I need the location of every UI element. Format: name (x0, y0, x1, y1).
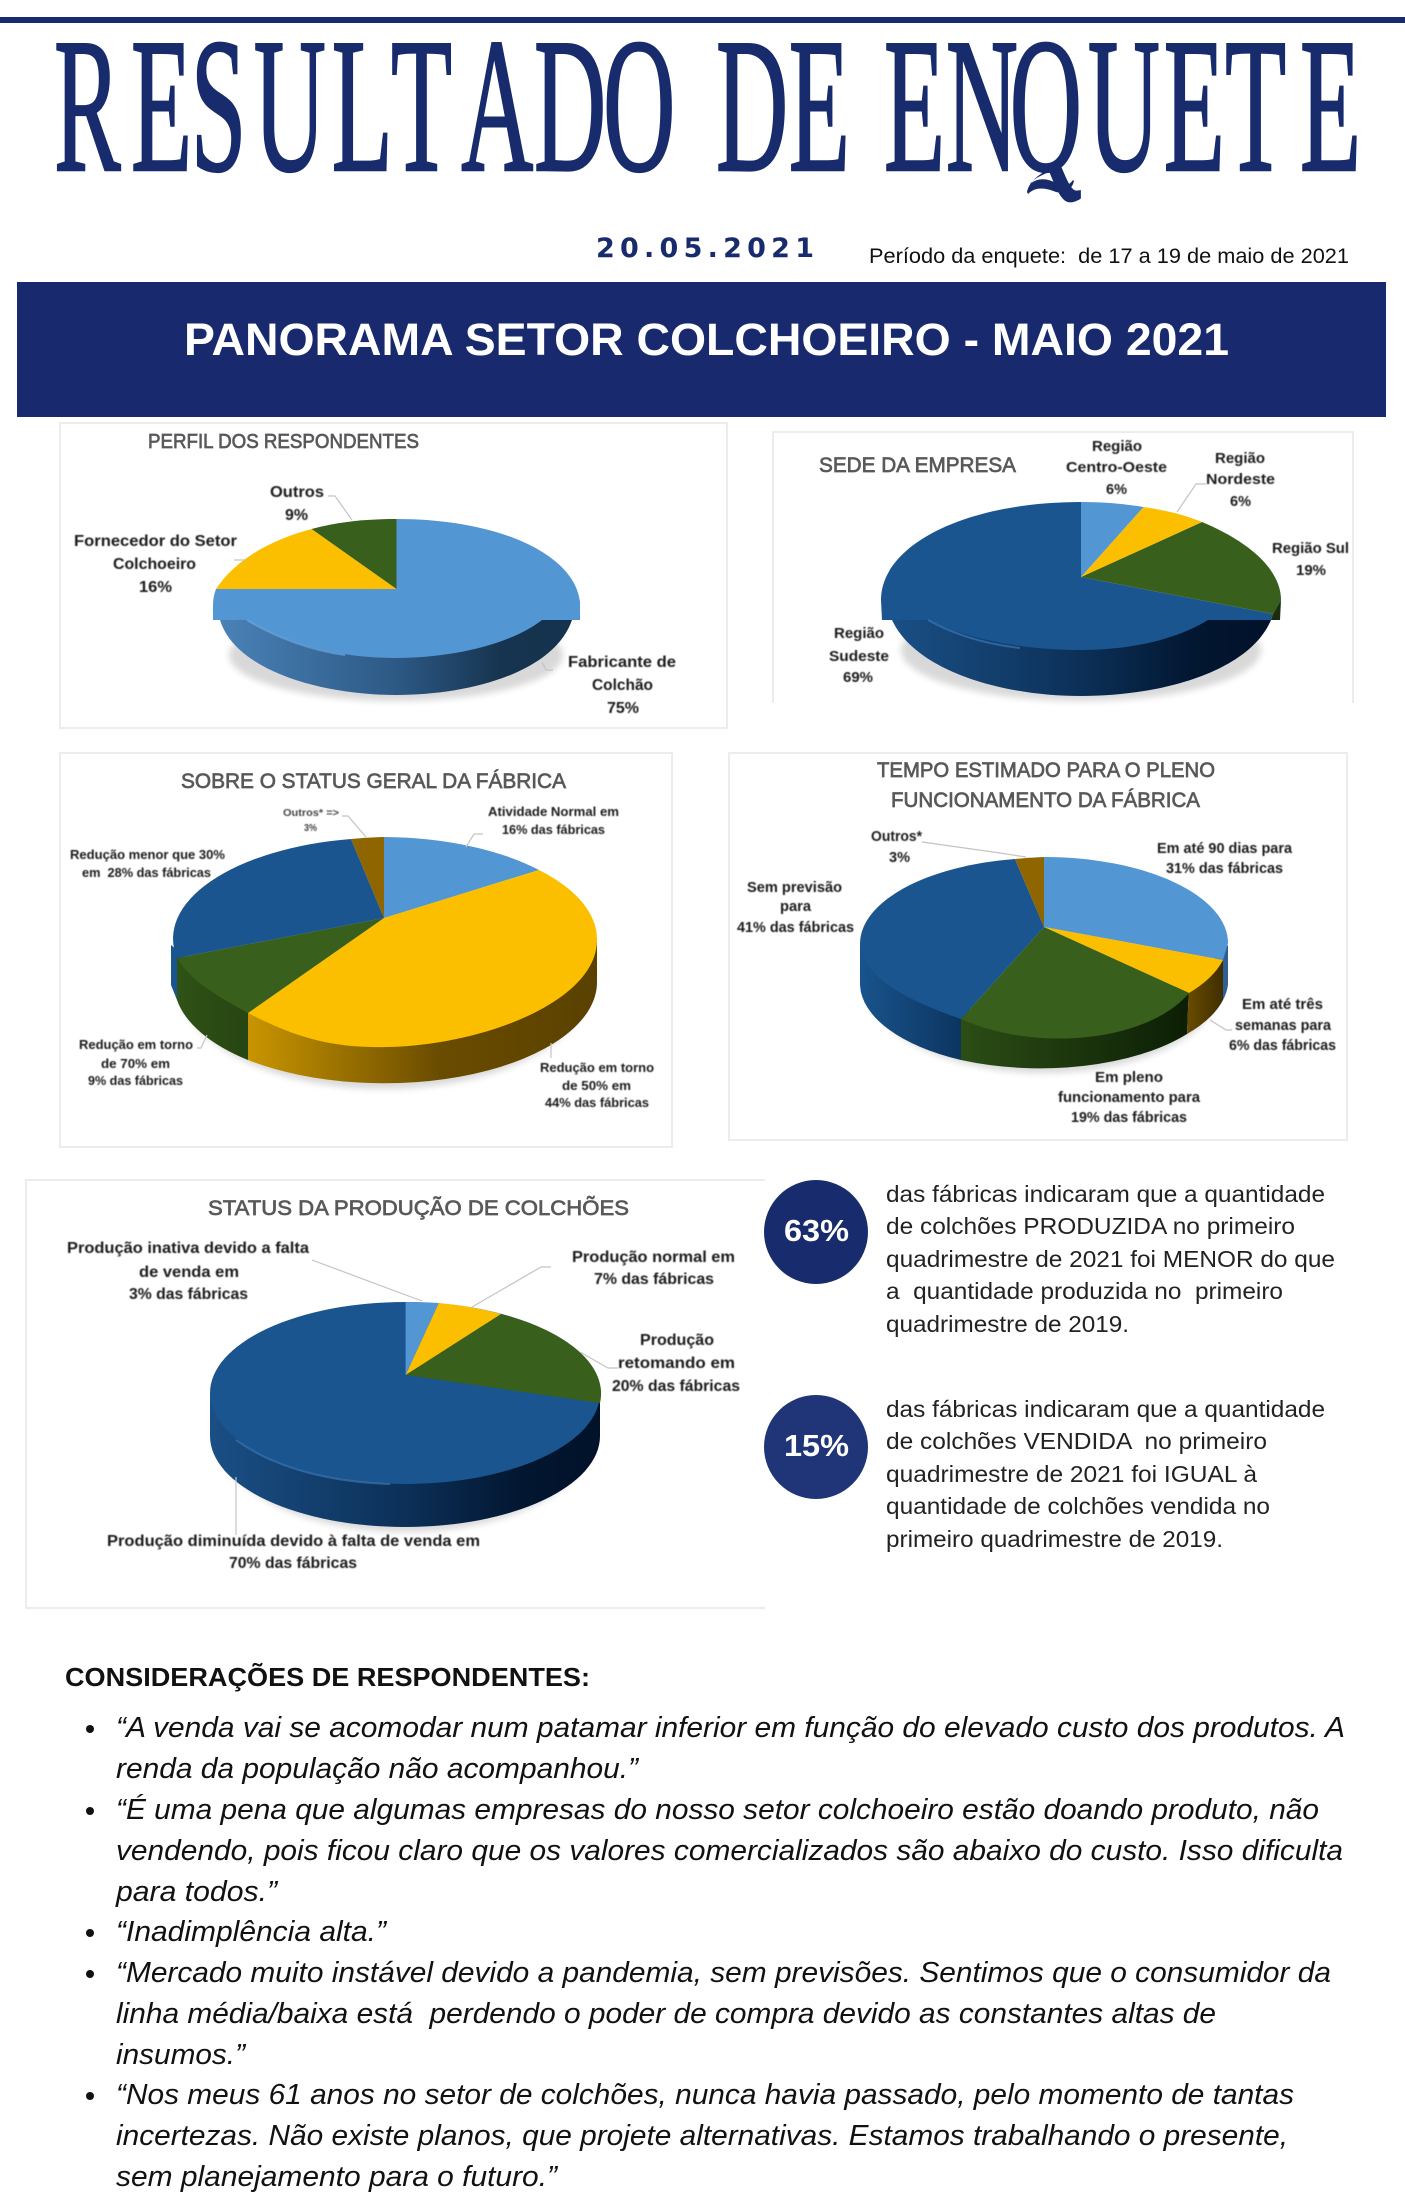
callout text: das fábricas indicaram que a quantidade (886, 1181, 1325, 1207)
data labels (737, 829, 1336, 1126)
data labels: Em pleno (1095, 1070, 1163, 1086)
data labels: Sem previsão (747, 880, 842, 896)
data labels: 3% (304, 823, 317, 834)
data labels: Sudeste (829, 648, 889, 665)
data labels (829, 438, 1349, 686)
callout text: quadrimestre de 2021 foi MENOR do que (886, 1246, 1335, 1272)
data labels: Região (1215, 450, 1265, 467)
data labels: 6% (1230, 493, 1251, 510)
leader lines (197, 816, 551, 1058)
pie chart (171, 837, 597, 1089)
callout text: quadrimestre de 2021 foi IGUAL à (886, 1461, 1258, 1487)
data labels: em 28% das fábricas (82, 865, 211, 880)
data labels: 19% das fábricas (1071, 1110, 1187, 1126)
data labels (70, 804, 654, 1110)
callout text (886, 1396, 1325, 1552)
callout text: quantidade de colchões vendida no (886, 1493, 1270, 1519)
chart title: PERFIL DOS RESPONDENTES (148, 431, 419, 453)
data labels: Outros (270, 484, 324, 501)
badge: 63% (784, 1213, 849, 1248)
badge (764, 1180, 868, 1284)
data labels: funcionamento para (1058, 1090, 1201, 1106)
quote 4 (86, 1957, 1331, 2071)
panel: sede da empresa (773, 432, 1353, 703)
data labels: 16% (139, 579, 172, 596)
data labels: 6% (1106, 481, 1127, 498)
data labels: Região (834, 625, 884, 642)
quote 1 (86, 1712, 1345, 1785)
data labels: Centro-Oeste (1066, 459, 1167, 476)
leader lines (236, 1260, 618, 1535)
callout text: de colchões VENDIDA no primeiro (886, 1428, 1267, 1454)
data labels: 75% (607, 700, 639, 717)
panel: perfil dos respondentes (60, 423, 727, 728)
callout: 63% (764, 1180, 1335, 1337)
data labels: para (780, 899, 812, 915)
data labels: Produção inativa devido a falta (67, 1240, 309, 1257)
data labels: Região (1092, 438, 1142, 455)
data labels: Nordeste (1206, 471, 1275, 488)
chart title: SOBRE O STATUS GERAL DA FÁBRICA (181, 770, 566, 793)
data labels: Fornecedor do Setor (74, 533, 237, 550)
quote 4: linha média/baixa está perdendo o poder de compra devido as constantes altas de (116, 1998, 1216, 2030)
callout text (886, 1181, 1335, 1337)
chart title: FUNCIONAMENTO DA FÁBRICA (891, 789, 1200, 812)
data labels: Atividade Normal em (488, 804, 619, 819)
data labels (67, 1240, 740, 1572)
callout text: quadrimestre de 2019. (886, 1311, 1129, 1337)
quote 5 (86, 2079, 1294, 2193)
callout text: de colchões PRODUZIDA no primeiro (886, 1213, 1295, 1239)
leader lines (234, 496, 553, 670)
data labels: de 70% em (101, 1056, 170, 1071)
data labels: Fabricante de (568, 654, 676, 671)
section heading: CONSIDERAÇÕES DE RESPONDENTES: (65, 1662, 590, 1692)
data labels: 70% das fábricas (229, 1555, 357, 1572)
panel: status da producao (26, 1180, 765, 1608)
panel: status geral da fabrica (60, 753, 672, 1147)
data labels: Colchão (592, 677, 653, 694)
data labels: Redução em torno (540, 1060, 654, 1075)
quote 2 (86, 1794, 1343, 1908)
title: RESULTADO DE ENQUETE (54, 1, 1361, 213)
quote 4: insumos.” (116, 2039, 247, 2071)
data labels: Produção (640, 1332, 714, 1349)
callout text: a quantidade produzida no primeiro (886, 1278, 1283, 1304)
leader lines (922, 842, 1232, 1030)
pie chart (860, 857, 1228, 1073)
badge: 15% (784, 1428, 849, 1463)
data labels: Produção diminuída devido à falta de venda em (107, 1533, 480, 1550)
data labels: semanas para (1235, 1018, 1332, 1034)
data labels (74, 484, 676, 717)
data labels: 69% (843, 669, 873, 686)
callout: 15% (764, 1395, 1325, 1552)
data labels: Em até três (1242, 997, 1323, 1013)
quote 1: “A venda vai se acomodar num patamar inferior em função do elevado custo dos produtos. A (116, 1712, 1345, 1744)
data labels: Outros* (871, 829, 922, 845)
quote 5: sem planejamento para o futuro.” (116, 2161, 559, 2193)
top rule (0, 17, 1405, 23)
data labels: 31% das fábricas (1166, 861, 1283, 877)
panel: tempo estimado (729, 753, 1347, 1140)
data labels: 7% das fábricas (594, 1271, 714, 1288)
data labels: Colchoeiro (113, 556, 196, 573)
quote 2: “É uma pena que algumas empresas do nosso setor colchoeiro estão doando produto, não (116, 1794, 1319, 1826)
quote 5: incertezas. Não existe planos, que projete alternativas. Estamos trabalhando o presente, (116, 2120, 1288, 2152)
date: 20.05.2021 (596, 233, 814, 264)
data labels: 44% das fábricas (545, 1095, 649, 1110)
survey period: Período da enquete: de 17 a 19 de maio de 2021 (869, 245, 1349, 268)
chart title: TEMPO ESTIMADO PARA O PLENO (877, 759, 1215, 782)
data labels: de 50% em (562, 1078, 631, 1093)
pie chart (210, 1302, 601, 1532)
banner (17, 282, 1386, 417)
data labels: 41% das fábricas (737, 920, 854, 936)
data labels: 9% (285, 507, 308, 524)
quote 2: vendendo, pois ficou claro que os valores comercializados são abaixo do custo. Isso dificulta (116, 1835, 1343, 1867)
data labels: Redução menor que 30% (70, 847, 225, 862)
data labels: de venda em (139, 1264, 239, 1281)
chart title (877, 759, 1215, 812)
badge (764, 1395, 868, 1499)
data labels: retomando em (618, 1355, 735, 1372)
data labels: Outros* => (283, 808, 339, 819)
data labels: 16% das fábricas (502, 822, 605, 837)
pie chart (881, 502, 1281, 701)
data labels: Produção normal em (572, 1249, 735, 1266)
chart title: SEDE DA EMPRESA (819, 454, 1016, 477)
chart title: STATUS DA PRODUÇÃO DE COLCHÕES (208, 1196, 629, 1220)
data labels: 6% das fábricas (1229, 1038, 1336, 1054)
banner: PANORAMA SETOR COLCHOEIRO - MAIO 2021 (184, 314, 1229, 365)
callout text: das fábricas indicaram que a quantidade (886, 1396, 1325, 1422)
leader line (1177, 484, 1206, 512)
quote 1: renda da população não acompanhou.” (116, 1753, 640, 1785)
callout text: primeiro quadrimestre de 2019. (886, 1526, 1223, 1552)
data labels: 3% das fábricas (129, 1286, 248, 1303)
data labels: Redução em torno (79, 1037, 193, 1052)
pie chart (213, 519, 580, 701)
data labels: 9% das fábricas (88, 1073, 183, 1088)
quote 2: para todos.” (115, 1876, 279, 1908)
respondent quotes (86, 1712, 1345, 2193)
quote 4: “Mercado muito instável devido a pandemia, sem previsões. Sentimos que o consumidor da (116, 1957, 1331, 1989)
data labels: Região Sul (1272, 540, 1349, 557)
data labels: 3% (889, 850, 910, 866)
data labels: 19% (1296, 562, 1326, 579)
data labels: Em até 90 dias para (1157, 841, 1293, 857)
quote 5: “Nos meus 61 anos no setor de colchões, nunca havia passado, pelo momento de tantas (116, 2079, 1294, 2111)
data labels: 20% das fábricas (612, 1378, 740, 1395)
quote 3: “Inadimplência alta.” (116, 1916, 388, 1948)
